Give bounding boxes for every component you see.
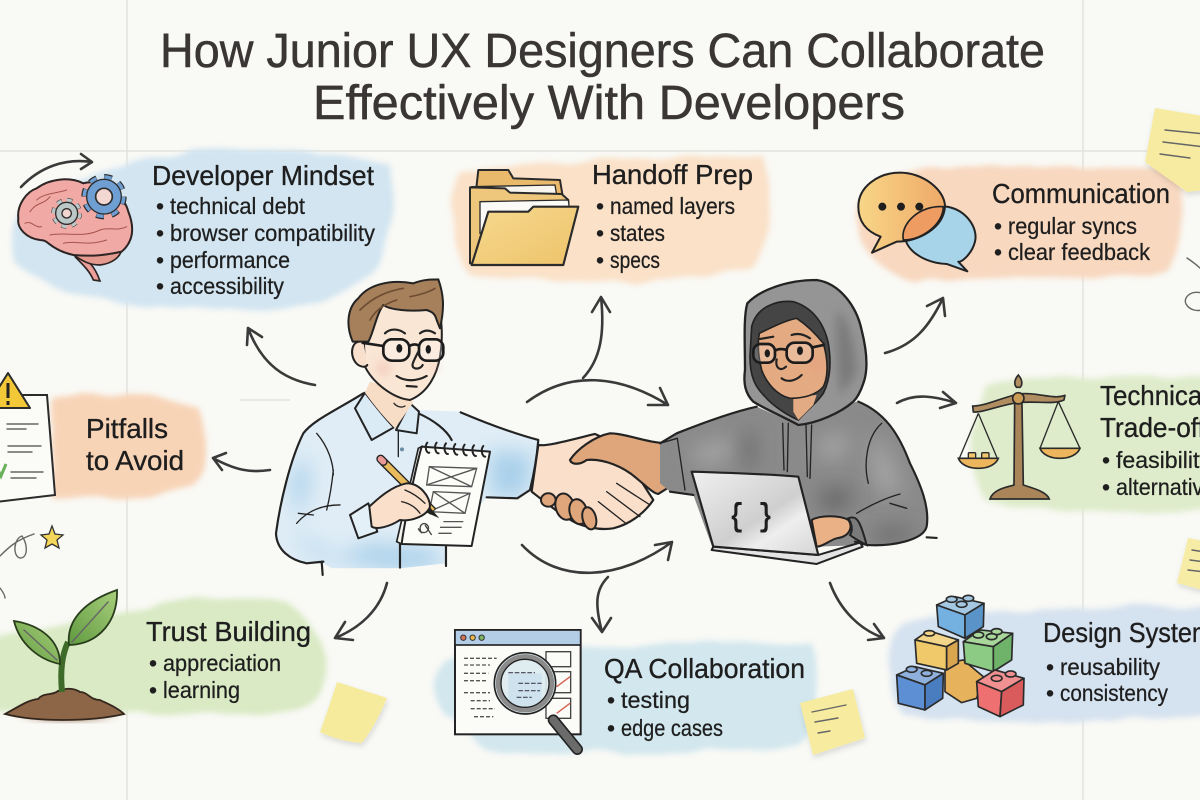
person: designer (276, 279, 670, 575)
hood (744, 280, 866, 425)
icon: chat bubbles (858, 173, 976, 271)
bullet list: accessibility (170, 273, 284, 299)
arrow: to technical trade-offs (897, 392, 956, 408)
icon: folder (470, 170, 578, 265)
dark hand (570, 433, 670, 494)
arrow: from designer to developer lower (522, 542, 672, 573)
bullet list: testing (621, 687, 690, 713)
panel: qa collaboration (435, 630, 817, 754)
sticky note: right edge (1177, 538, 1200, 592)
bullet list: • (994, 239, 1002, 265)
writing hand (369, 483, 430, 528)
heading (86, 413, 184, 476)
bullet list (1102, 447, 1200, 500)
bullet list: • (156, 247, 164, 273)
heading: Pitfalls (86, 413, 168, 444)
bullet list (994, 213, 1150, 265)
shirt (276, 393, 538, 568)
heading: Developer Mindset (152, 160, 374, 191)
arrow: brain loop (21, 154, 92, 187)
bullet list: states (610, 220, 665, 246)
head (364, 300, 442, 400)
bullet list: • (149, 677, 157, 703)
heading: Communication (992, 178, 1170, 209)
arrow: to trust building (335, 583, 387, 640)
icon: brain with gears (18, 178, 132, 281)
heading: to Avoid (86, 445, 184, 476)
arrow: to developer (527, 380, 668, 405)
sticky note: lower left (320, 682, 387, 743)
fingers (541, 491, 599, 531)
title: How Junior UX Designers Can Collaborate (160, 25, 1045, 78)
bullet list: • (596, 247, 604, 273)
notepad (397, 447, 422, 544)
bullet list: • (607, 687, 615, 713)
laptop (712, 543, 863, 564)
bullet list: • (1046, 654, 1054, 680)
bullet list: clear feedback (1008, 239, 1150, 265)
glasses (362, 339, 443, 361)
bullet list: • (156, 273, 164, 299)
panel: design system (889, 595, 1200, 722)
bullet list: • (607, 715, 615, 741)
title: Effectively With Developers (313, 77, 905, 130)
icon: warning checklist (0, 373, 55, 502)
arrow: to qa (592, 577, 611, 632)
bullet list: technical debt (170, 193, 306, 219)
icon: browser window with magnifier (455, 630, 581, 749)
bullet list: • (1102, 474, 1110, 500)
bullet list (596, 193, 735, 273)
light hand (532, 434, 653, 529)
hand on keyboard (812, 516, 851, 547)
hood opening and hair (750, 301, 830, 420)
panel: communication (857, 166, 1183, 282)
heading: Trust Building (146, 616, 311, 647)
bullet list: • (596, 220, 604, 246)
icon: building blocks (897, 595, 1024, 717)
bullet list: learning (163, 677, 240, 703)
icon: sprout (5, 590, 124, 720)
bullet list: • (1046, 680, 1054, 706)
bullet list (156, 193, 375, 299)
glasses (753, 343, 825, 363)
person: developer in hoodie: { } (729, 499, 773, 536)
person: developer in hoodie (660, 280, 937, 564)
face details (765, 349, 770, 357)
bullet list (607, 687, 723, 741)
title (160, 25, 1045, 130)
bullet list: • (156, 193, 164, 219)
bullet list: edge cases (621, 715, 723, 741)
hair (348, 279, 443, 342)
icon: balance scales (958, 375, 1080, 499)
bullet list: • (596, 193, 604, 219)
bullet list: regular syncs (1008, 213, 1137, 239)
bullet list: • (1102, 447, 1110, 473)
bullet list (1046, 654, 1168, 706)
panel: handoff prep (452, 158, 771, 281)
arrow: to pitfalls (213, 453, 270, 471)
bullet list: • (994, 213, 1002, 239)
doodle: right edge swirl (1185, 258, 1200, 310)
bullet list: consistency (1060, 680, 1168, 706)
panel: trust building (0, 590, 326, 720)
sticky note: top right (1145, 108, 1200, 192)
bullet list: reusability (1060, 654, 1160, 680)
panel: technical trade-offs (958, 374, 1200, 512)
bullet list: specs (610, 247, 660, 273)
pencil (383, 462, 433, 512)
heading: Handoff Prep (592, 159, 753, 190)
bullet list: performance (170, 247, 290, 273)
arrow: to communication (885, 298, 945, 353)
arrow: to developer mindset (247, 328, 315, 385)
panel: developer mindset (11, 149, 393, 308)
doodle: swirl and star (0, 526, 63, 598)
arrows (213, 297, 956, 640)
face (758, 318, 827, 398)
panel: pitfalls to avoid (0, 373, 204, 502)
collar (355, 393, 394, 440)
bullet list: appreciation (163, 650, 281, 676)
neck (365, 382, 413, 428)
bullet list: named layers (610, 193, 735, 219)
bullet list (149, 650, 281, 703)
heading: QA Collaboration (604, 653, 805, 684)
cuff (350, 503, 377, 538)
bullet list: • (149, 650, 157, 676)
bullet list: browser compatibility (170, 220, 375, 246)
arrow: to design system (830, 583, 884, 640)
hoodie body (660, 402, 927, 550)
arrow: to handoff (583, 297, 610, 378)
face details (396, 344, 402, 353)
bullet list: • (156, 220, 164, 246)
sticky note: bottom centre (800, 689, 865, 755)
